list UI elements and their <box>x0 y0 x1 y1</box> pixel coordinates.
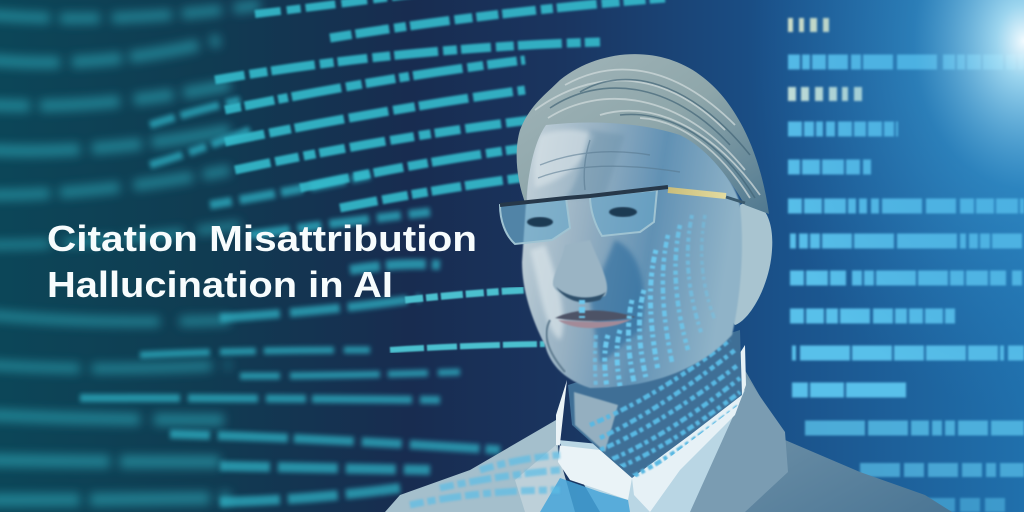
temple arm <box>668 190 726 196</box>
shirt and collar <box>540 345 746 512</box>
face <box>522 118 742 388</box>
left collar <box>556 380 632 500</box>
nose <box>553 240 607 298</box>
code reflected on shoulder and chest <box>410 455 560 505</box>
frame top and bridge <box>500 187 668 205</box>
background: sharper sloped code rows <box>215 0 665 208</box>
right lens <box>590 190 657 236</box>
right code rows <box>788 62 1024 505</box>
left lapel <box>515 445 575 512</box>
mouth <box>555 310 636 328</box>
code projected on face <box>582 215 715 388</box>
glasses <box>500 187 745 244</box>
cheek highlight <box>530 245 563 340</box>
title line 2: Hallucination in AI <box>47 264 393 305</box>
background: right code column <box>788 25 1024 505</box>
background: far-left blurred code rows <box>0 5 260 500</box>
background: sharper lower code rows <box>390 290 545 350</box>
jaw crease <box>546 320 565 372</box>
forehead highlight <box>534 130 595 188</box>
right lapel and shoulder <box>685 365 952 512</box>
code projected on neck <box>590 340 740 480</box>
eyes <box>527 217 553 227</box>
forehead wrinkles <box>538 140 680 190</box>
background: middle blurred code rows <box>80 100 500 502</box>
left shoulder <box>385 420 560 512</box>
background: bright glow top right <box>640 0 1024 512</box>
combed hair strands <box>535 70 760 198</box>
left lens <box>500 198 570 244</box>
hair <box>517 54 769 214</box>
cheek shadow <box>590 240 644 365</box>
suit jacket <box>385 365 952 512</box>
neck <box>568 330 742 480</box>
title <box>47 218 477 305</box>
ear <box>731 202 772 325</box>
lapel shadow <box>688 375 788 512</box>
forehead shading <box>565 130 625 198</box>
right collar <box>632 345 746 512</box>
title line 1: Citation Misattribution <box>47 218 477 259</box>
short pale rows at top <box>788 18 832 32</box>
open chest with code reflection <box>540 478 630 512</box>
shirt front <box>558 390 745 512</box>
